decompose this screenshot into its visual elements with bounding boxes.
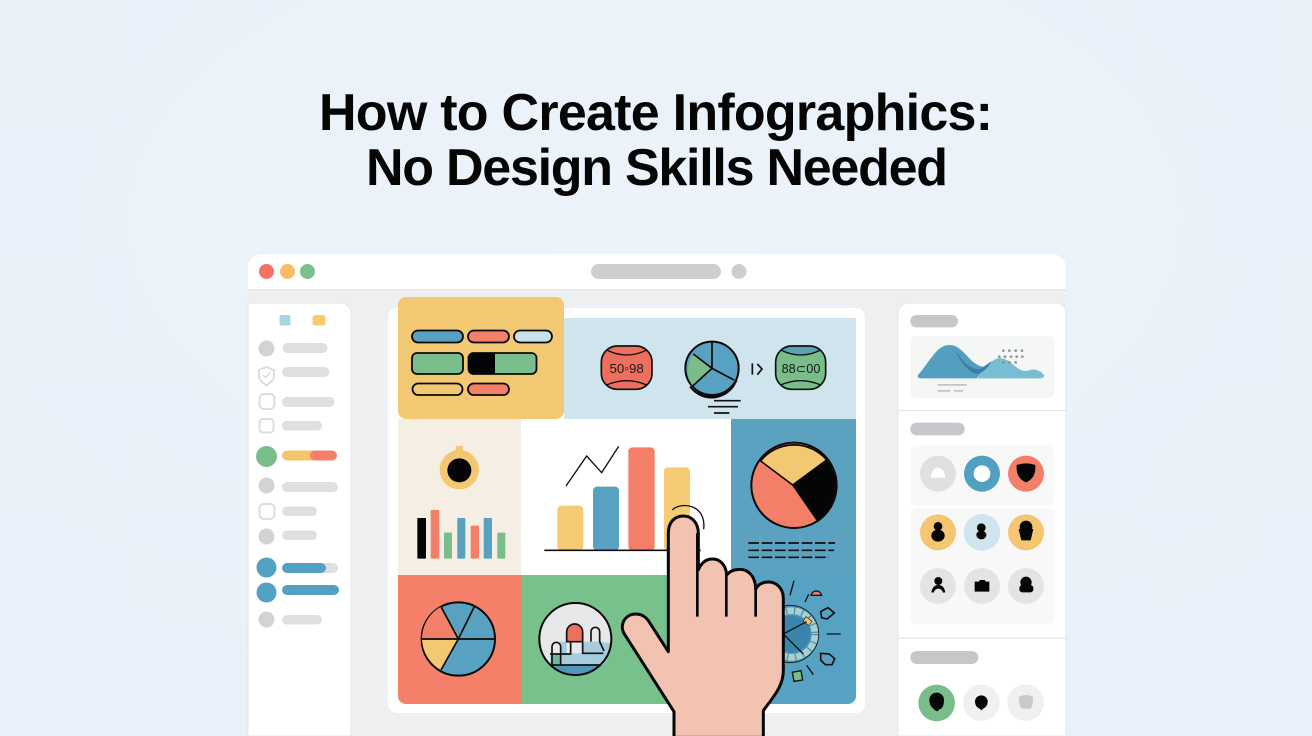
pie with lines xyxy=(685,342,741,413)
tile: light blue badges and pie xyxy=(601,342,826,413)
tile: green round illustration xyxy=(539,603,611,676)
tile: yellow buttons xyxy=(398,297,564,419)
app window xyxy=(248,254,1066,736)
small arrows xyxy=(752,363,762,375)
coral badge: 50◦98 xyxy=(609,361,644,376)
icon row two xyxy=(920,514,1044,551)
tile: blue radial dial xyxy=(761,581,841,681)
canvas panel xyxy=(388,297,865,713)
tile: coral pie xyxy=(422,602,495,676)
green badge xyxy=(776,346,826,389)
icon row three xyxy=(920,568,1044,604)
section: area chart xyxy=(910,315,1054,398)
icon row one xyxy=(920,456,1044,492)
coral badge xyxy=(601,346,652,389)
tile: blue pie and text lines xyxy=(748,443,837,557)
right panel xyxy=(898,303,1066,736)
title: How to Create Infographics: xyxy=(319,84,993,142)
toolbar xyxy=(248,254,1066,290)
section: icon grid xyxy=(910,423,1054,624)
title xyxy=(319,84,993,197)
green badge: 88⊂00 xyxy=(782,362,820,376)
left sidebar xyxy=(248,303,351,736)
title: No Design Skills Needed xyxy=(366,139,948,197)
hand pointer xyxy=(622,516,783,736)
tile backgrounds xyxy=(398,318,856,704)
tile: beige column chart xyxy=(417,446,505,559)
tile: main bar chart xyxy=(544,446,704,551)
section: bottom icons xyxy=(910,651,1044,721)
